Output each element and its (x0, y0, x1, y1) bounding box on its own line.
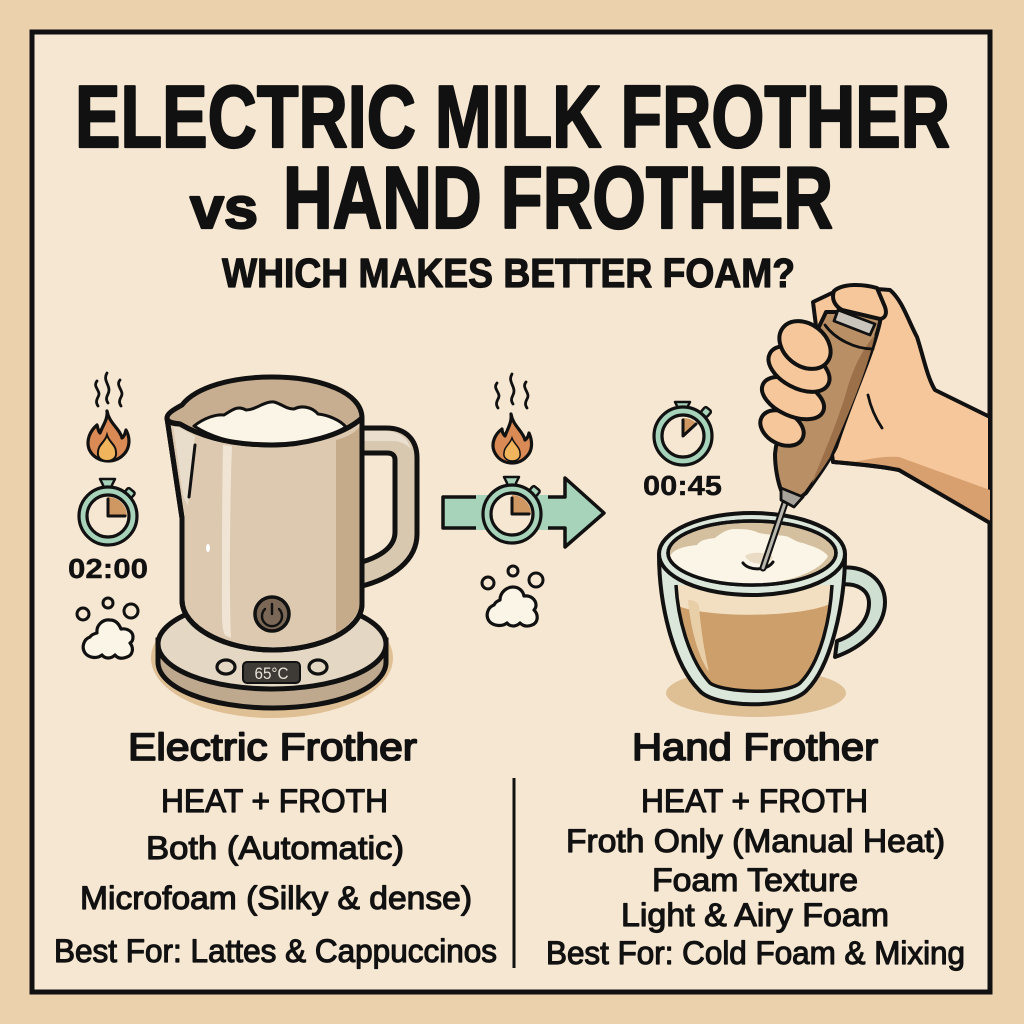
title (75, 67, 950, 247)
text: froth only: Froth Only (Manual Heat) (566, 823, 945, 859)
right timer label: 00:45 (643, 470, 722, 501)
divider (512, 778, 516, 968)
title: HAND FROTHER (283, 148, 833, 247)
thumb (833, 285, 886, 319)
heading: hand frother: Hand Frother (632, 727, 878, 769)
hand (813, 288, 990, 522)
temperature display (243, 662, 300, 683)
coffee (676, 585, 832, 691)
text: light foam: Light & Airy Foam (621, 897, 889, 933)
icon: power button (255, 597, 289, 631)
text: microfoam: Microfoam (Silky & dense) (80, 880, 472, 916)
icon: left steam and flame (88, 373, 129, 461)
jug body (167, 418, 362, 650)
subtitle: WHICH MAKES BETTER FOAM? (222, 250, 795, 296)
milk foam (670, 529, 828, 584)
icon: left stopwatch (79, 479, 137, 545)
illustration: glass cup (659, 503, 885, 717)
arrow (443, 478, 604, 547)
icon: middle foam (482, 566, 543, 626)
text: heat and froth: HEAT + FROTH (161, 783, 388, 819)
icon: middle steam and flame (493, 374, 532, 463)
illustration: electric frother (151, 377, 417, 718)
text: heat and froth: HEAT + FROTH (641, 783, 868, 819)
text: best for: Best For: Cold Foam & Mixing (546, 935, 965, 971)
jug rim and foam (167, 377, 362, 445)
illustration: hand holding frother (754, 285, 990, 523)
base (158, 599, 386, 708)
text: foam texture: Foam Texture (652, 862, 858, 898)
handle (360, 428, 417, 586)
cup rim (659, 513, 845, 595)
left timer label: 02:00 (68, 553, 148, 584)
panel: hand frother text (546, 727, 965, 971)
cup glass (659, 554, 845, 704)
title: vs (190, 176, 258, 241)
whisk shaft (763, 503, 785, 568)
shadow under base (151, 598, 393, 718)
heading: electric frother: Electric Frother (128, 727, 417, 769)
cup handle (835, 567, 885, 657)
temperature display: 65°C (254, 664, 288, 683)
text: best for: Best For: Lattes & Cappuccinos (54, 933, 497, 969)
icon: left foam (77, 598, 138, 658)
icon: right stopwatch (654, 402, 712, 465)
icon: middle stopwatch (476, 477, 548, 543)
fingers (754, 311, 840, 453)
text: automatic: Both (Automatic) (146, 830, 404, 866)
base buttons (217, 660, 327, 674)
cup shadow (666, 669, 846, 717)
panel: electric frother text (54, 727, 497, 969)
frother handle (775, 312, 880, 502)
